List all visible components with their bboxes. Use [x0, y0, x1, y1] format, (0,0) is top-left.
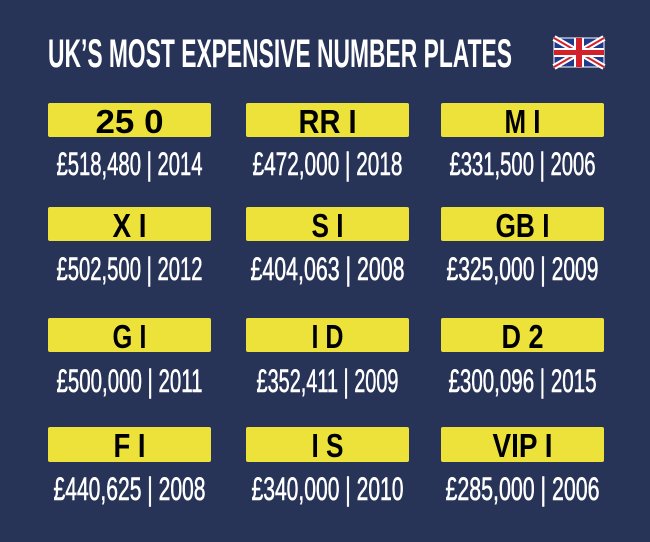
plate: S 1 — [246, 207, 409, 244]
price: 1 D: £352,411 | 2009 — [256, 363, 398, 399]
price: 25 0: £518,480 | 2014 — [56, 146, 202, 182]
plate: D 2: D 2 — [502, 318, 544, 355]
plate: RR 1 — [246, 103, 409, 140]
plate: GB 1: GB I — [496, 207, 550, 244]
plate: D 2 — [441, 318, 604, 355]
plate: 1 S: I S — [312, 427, 344, 464]
plate: VIP 1: VIP I — [492, 427, 552, 464]
plate: M 1: M I — [504, 103, 540, 140]
plate: X 1 — [48, 207, 211, 244]
icon: union jack flag — [554, 38, 604, 67]
plate: G 1 — [48, 318, 211, 355]
plate: RR 1: RR I — [298, 103, 356, 140]
price: X 1: £502,500 | 2012 — [56, 251, 202, 287]
plate: 25 0 — [48, 103, 211, 140]
plate: F 1 — [48, 427, 211, 464]
plate: VIP 1 — [441, 427, 604, 464]
price: RR 1: £472,000 | 2018 — [252, 146, 402, 182]
price: S 1: £404,063 | 2008 — [250, 251, 404, 287]
price: G 1: £500,000 | 2011 — [56, 363, 202, 399]
plate: GB 1 — [441, 207, 604, 244]
plate: 1 S — [246, 427, 409, 464]
price: 1 S: £340,000 | 2010 — [252, 471, 404, 507]
plate: 1 D: I D — [312, 318, 344, 355]
plate: X 1: X I — [112, 207, 146, 244]
plate: 1 D — [246, 318, 409, 355]
plate: S 1: S I — [312, 207, 344, 244]
plate: G 1: G I — [112, 318, 146, 355]
plate: M 1 — [441, 103, 604, 140]
plate: F 1: F I — [114, 427, 146, 464]
price: F 1: £440,625 | 2008 — [54, 471, 206, 507]
plate: 25 0: 25 0 — [96, 103, 164, 140]
